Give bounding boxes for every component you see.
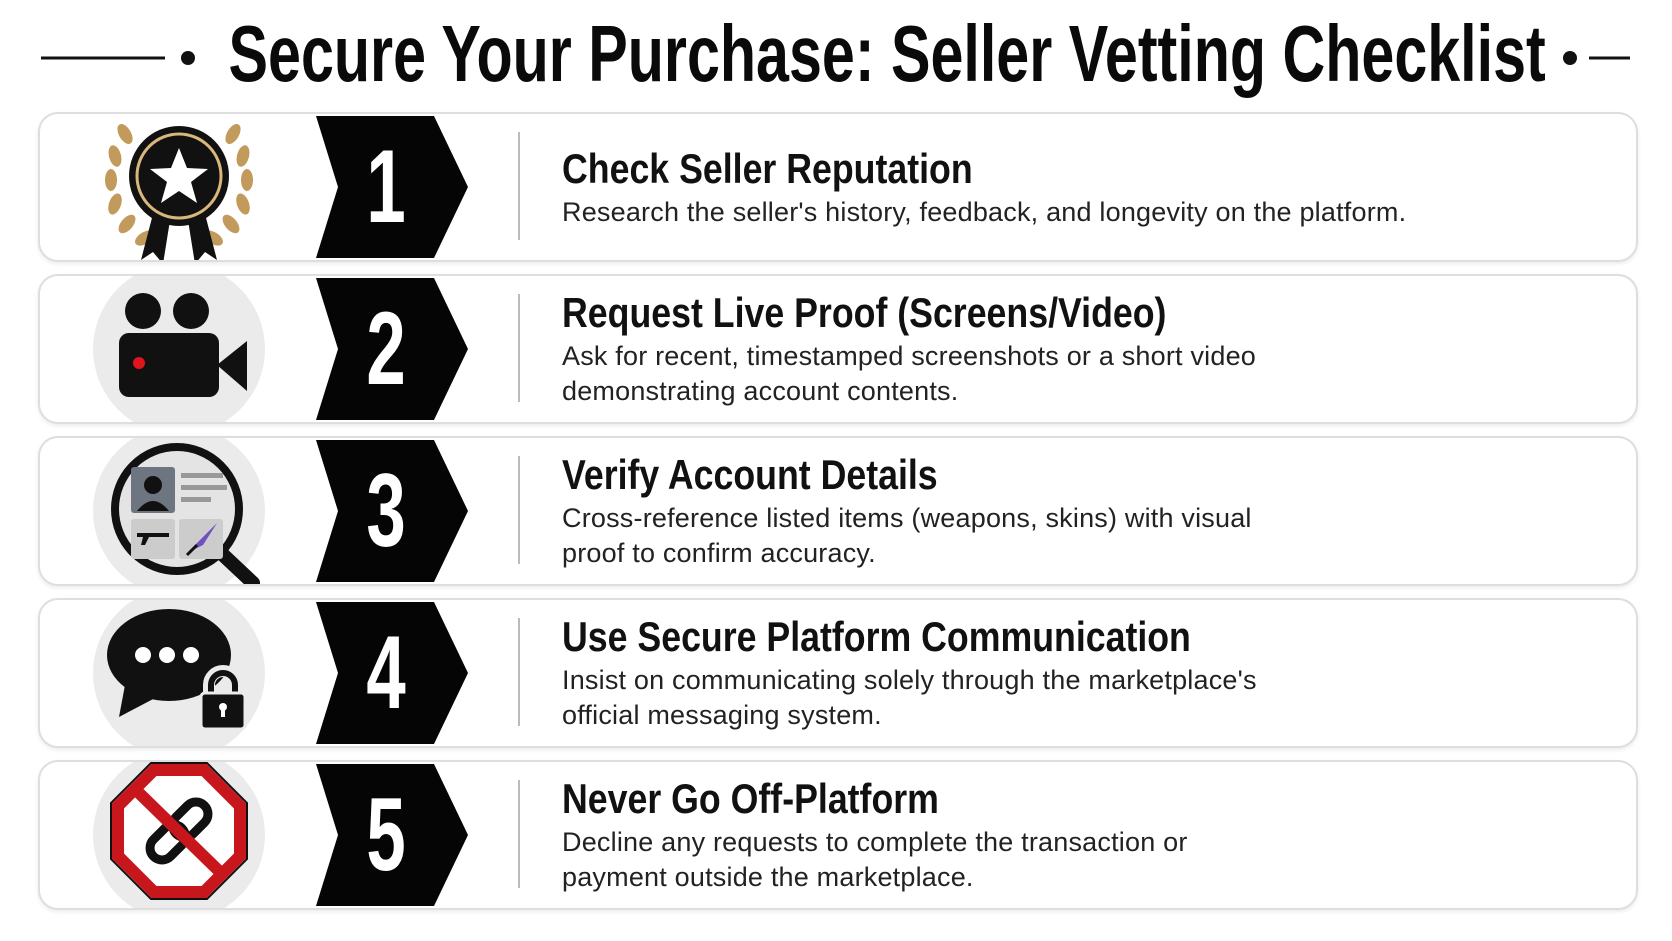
text: step 1 [562,144,1406,226]
panel: step 5 [38,760,1638,910]
text: step 3: proof to confirm accuracy. [562,538,876,568]
text: step 4: Use Secure Platform Communication [562,613,1191,660]
text: step 3 [562,451,1252,568]
chevron number 3 [316,440,468,582]
text: step 3: Cross-reference listed items (weapons, skins) with visual [562,503,1252,533]
text: step 5: payment outside the marketplace. [562,862,974,892]
text: step 2: Ask for recent, timestamped screenshots or a short video [562,341,1256,371]
text: step 2 [562,289,1256,406]
icon: magnifier over account [93,438,265,584]
panel: step 4: 4 [366,615,406,731]
panel: step 3 [38,436,1638,586]
icon: chat bubble with lock [93,600,265,746]
text: step 2: Request Live Proof (Screens/Video) [562,289,1166,336]
text: step 4: official messaging system. [562,700,882,730]
icon: video camera [93,276,265,422]
panel: step 1: 1 [366,129,406,245]
panel: step 2: 2 [366,291,406,407]
icon: no external link sign [93,762,265,908]
chevron number 4 [316,602,468,744]
text: step 2: demonstrating account contents. [562,376,958,406]
text: step 5: Never Go Off-Platform [562,775,939,822]
text: step 1: Check Seller Reputation [562,144,973,192]
text: step 4: Insist on communicating solely through the marketplace's [562,665,1257,695]
panel: step 1 [38,112,1638,262]
chevron number 5 [316,764,468,906]
text: step 5: Decline any requests to complete the transaction or [562,827,1188,857]
panel: step 2 [38,274,1638,424]
icon: award medal [105,124,253,260]
text: step 1: Research the seller's history, feedback, and longevity on the platform. [562,196,1406,226]
panel: step 5: 5 [366,777,406,893]
text: step 4 [562,613,1257,730]
chevron number 1 [316,116,468,258]
text: step 5 [562,775,1188,892]
text: step 3: Verify Account Details [562,451,938,498]
chevron number 2 [316,278,468,420]
panel: step 3: 3 [366,453,406,569]
panel: step 4 [38,598,1638,748]
title: Secure Your Purchase: Seller Vetting Checklist [229,9,1546,98]
